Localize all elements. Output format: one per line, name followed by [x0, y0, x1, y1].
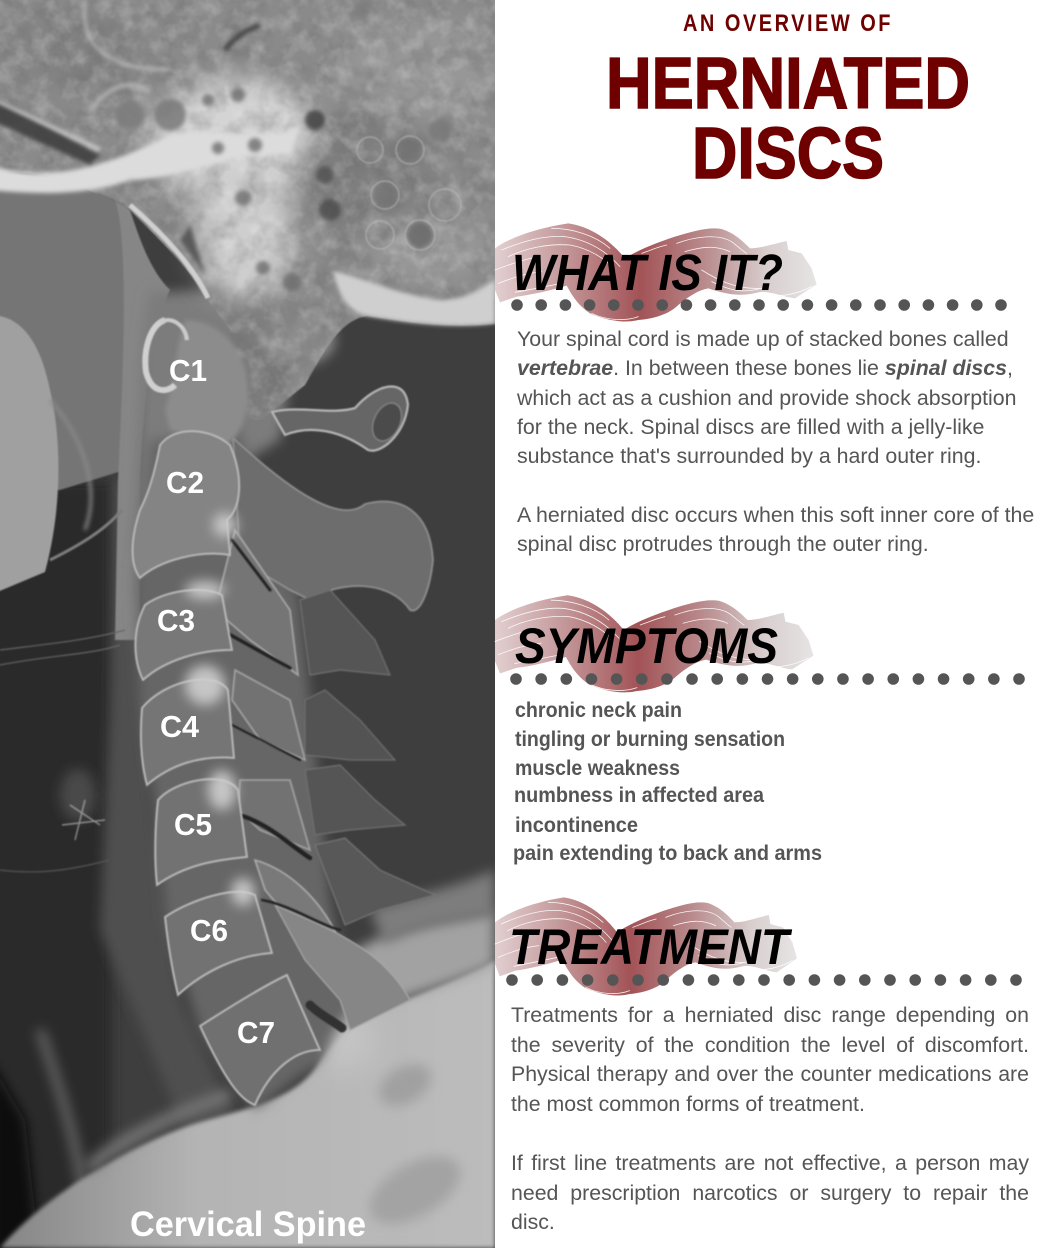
heading: what is it: WHAT IS IT?	[512, 244, 783, 301]
title: Discs: DISCS	[692, 114, 884, 194]
label C7: C7	[237, 1015, 275, 1050]
jaw tone	[0, 315, 58, 595]
caption: Cervical Spine: Cervical Spine	[130, 1205, 366, 1244]
skull mottled texture	[0, 0, 495, 420]
text block: what is it paragraph two: spinal disc protrudes through the outer ring.	[517, 532, 929, 556]
neck soft-tissue calcification	[0, 630, 125, 872]
text block: what is it paragraph one: vertebrae. In between these bones lie spinal discs,	[517, 356, 1013, 380]
brush stroke: what is it	[495, 223, 817, 321]
heading: treatment: TREATMENT	[509, 919, 793, 975]
label C4: C4	[160, 709, 200, 744]
text block: treatment paragraph one	[511, 1003, 1029, 1116]
text block: what is it paragraph one: for the neck. Spinal discs are filled with a jelly-like	[517, 415, 984, 439]
x-ray background tones	[0, 0, 505, 1248]
symptom: muscle weakness: muscle weakness	[515, 757, 680, 780]
skull region	[0, 0, 505, 425]
air cells	[116, 88, 451, 291]
bright skull base streak	[0, 125, 300, 193]
cervical vertebra labels	[157, 353, 275, 1050]
dotted rule: treatment	[512, 974, 1017, 986]
label C2: C2	[166, 465, 204, 500]
symptom: incontinence: incontinence	[515, 814, 638, 837]
text block: treatment paragraph two	[511, 1151, 1029, 1234]
symptom: numbness in affected area: numbness in affected area	[514, 784, 764, 807]
shoulder and lower tones	[0, 960, 495, 1248]
label C1: C1	[169, 353, 207, 388]
bright skull base patches	[150, 80, 320, 200]
x-ray image panel: cervical spine	[0, 0, 495, 1248]
label C3: C3	[157, 603, 195, 638]
text block: treatment paragraph one: the severity of the condition the level of discomfort.	[511, 1032, 1029, 1056]
brush stroke: treatment	[495, 897, 797, 995]
bright occipital band	[333, 271, 495, 325]
title: An overview of: AN OVERVIEW OF	[683, 10, 893, 37]
symptoms list	[513, 699, 822, 865]
text block: what is it paragraph one: Your spinal cord is made up of stacked bones called	[517, 327, 1009, 351]
vertebra C1 ring	[145, 320, 248, 445]
text block: treatment paragraph one: Treatments for a herniated disc range depending on	[511, 1003, 1029, 1027]
label C6: C6	[190, 913, 228, 948]
vertebrae bodies C2 to C7	[132, 431, 320, 1105]
brush stroke: symptoms	[495, 595, 813, 692]
heading: symptoms: SYMPTOMS	[515, 618, 778, 674]
text block: what is it paragraph two	[517, 503, 1034, 556]
symptom: pain extending to back and arms: pain extending to back and arms	[513, 842, 822, 865]
text block: treatment paragraph one: Physical therapy and over the counter medications are	[511, 1062, 1029, 1086]
text block: what is it paragraph two: A herniated disc occurs when this soft inner core of the	[517, 503, 1034, 527]
spinal column backing tone	[135, 430, 350, 1110]
text block: what is it paragraph one: which act as a cushion and provide shock absorption	[517, 386, 1017, 410]
neck soft tissue band	[100, 480, 240, 1130]
dark disc gaps	[218, 540, 342, 1028]
text block: treatment paragraph two: need prescription narcotics or surgery to repair the	[511, 1180, 1029, 1204]
symptom: chronic neck pain: chronic neck pain	[515, 699, 682, 722]
text block: treatment paragraph two: If first line treatments are not effective, a person may	[511, 1151, 1029, 1175]
symptom: tingling or burning sensation: tingling or burning sensation	[515, 728, 785, 751]
text block: what is it paragraph one	[517, 327, 1017, 468]
bright bone spurs	[185, 513, 255, 906]
dotted rule: symptoms	[516, 673, 1020, 685]
dotted rule: what is it	[517, 299, 1002, 311]
label C5: C5	[174, 807, 212, 842]
text block: what is it paragraph one: substance that's surrounded by a hard outer ring.	[517, 444, 981, 468]
posterior processes	[215, 386, 435, 1030]
text block: treatment paragraph two: disc.	[511, 1210, 555, 1234]
text block: treatment paragraph one: the most common forms of treatment.	[511, 1092, 865, 1116]
title: Herniated: HERNIATED	[606, 44, 970, 124]
